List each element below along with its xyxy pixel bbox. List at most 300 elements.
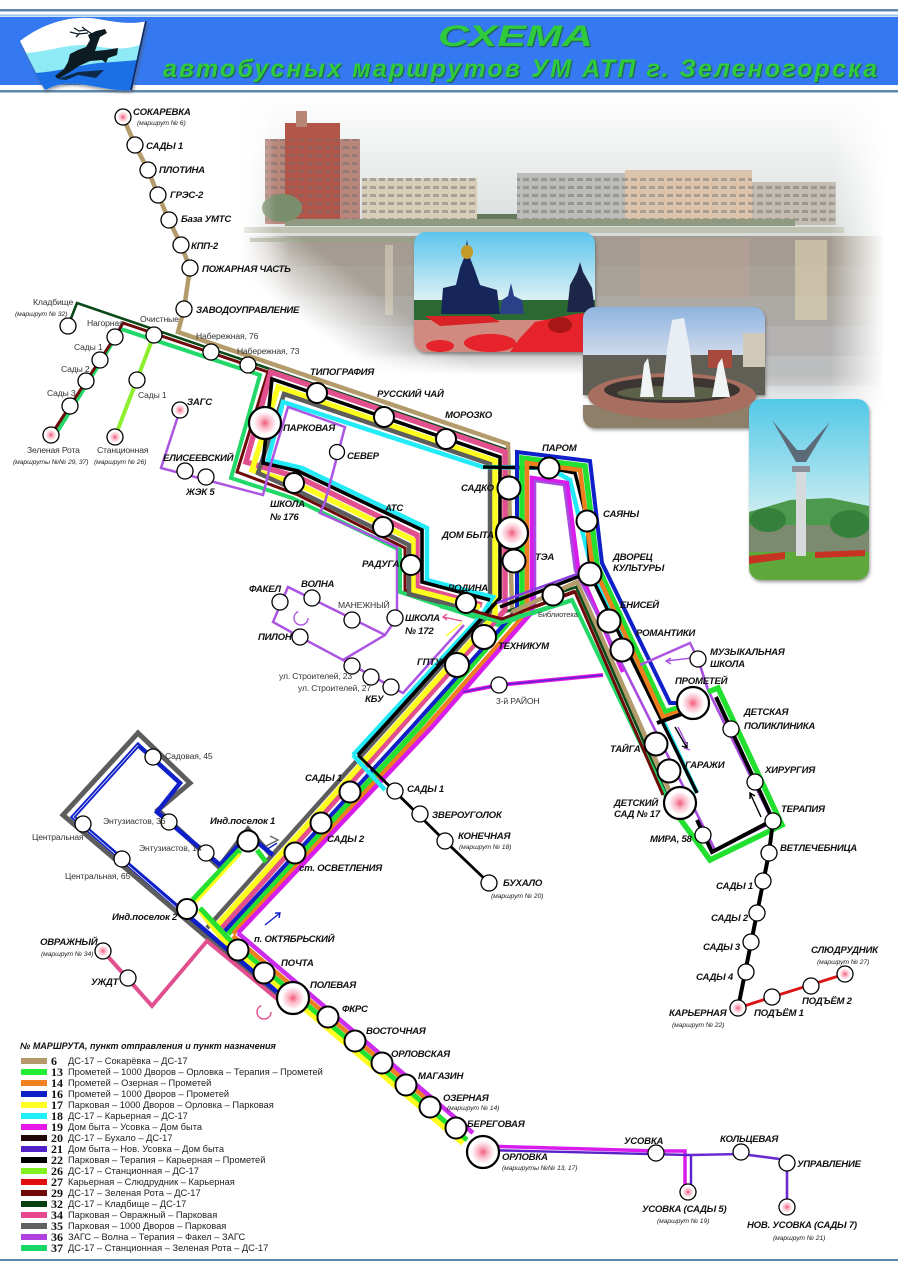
stop: Морозко xyxy=(436,410,493,449)
stop: Бухало: (маршрут № 20) xyxy=(491,893,543,900)
stop: Дворец культуры xyxy=(578,552,665,586)
stop: Зеленая Рота: (маршруты №№ 29, 37) xyxy=(13,459,88,466)
stop: Карьерная: КАРЬЕРНАЯ xyxy=(669,1008,728,1019)
legend: 32 xyxy=(51,1197,63,1211)
stop: Энтузиастов 36 xyxy=(103,814,177,830)
photo: stele xyxy=(749,399,870,580)
stop: Слюдрудник: (маршрут № 27) xyxy=(817,959,869,966)
route 36 violet inner xyxy=(535,481,773,850)
stop: База УМТС: База УМТС xyxy=(181,214,232,225)
stop: Заводоуправление: ЗАВОДОУПРАВЛЕНИЕ xyxy=(196,305,300,316)
stop: Сады 2 diagonal: САДЫ 2 xyxy=(327,834,365,845)
stop: Озерная: ОЗЕРНАЯ xyxy=(443,1093,490,1104)
route 21 to Usovka xyxy=(483,1150,691,1192)
stop: Сады 1 west xyxy=(74,342,108,368)
legend: Дом быта – Нов. Усовка – Дом быта xyxy=(68,1144,225,1154)
stop: Сады 3 west xyxy=(47,388,78,414)
stops and labels: south-east xyxy=(228,933,862,1242)
stop: Саяны: САЯНЫ xyxy=(603,509,640,520)
stop: Библиотека: Библиотека xyxy=(538,610,579,619)
stop: п. Октябрьский xyxy=(228,933,336,960)
legend: ДС-17 – Станционная – Зеленая Рота – ДС-17 xyxy=(68,1243,268,1253)
stop: Волна xyxy=(301,579,335,606)
stop: Детский сад № 17: ДЕТСКИЙ xyxy=(613,797,659,809)
stop: Техникум xyxy=(472,625,550,652)
stop: Север xyxy=(330,444,380,462)
route 18 cyan xyxy=(268,402,697,793)
stop: Пожарная часть: ПОЖАРНАЯ ЧАСТЬ xyxy=(202,264,291,275)
route 22 black upper xyxy=(263,379,500,755)
stop: Инд. поселок 1 xyxy=(210,816,275,852)
stop: ГРЭС-2 xyxy=(150,187,204,203)
stop: Усовка xyxy=(624,1136,664,1161)
legend: ДС-17 – Зеленая Рота – ДС-17 xyxy=(68,1188,201,1198)
stop: Сады 2 west xyxy=(61,364,94,389)
stop: Музыкальная школа: ШКОЛА xyxy=(710,659,745,670)
route 22 east loop xyxy=(697,697,773,852)
legend: ЗАГС – Волна – Терапия – Факел – ЗАГС xyxy=(68,1232,245,1242)
stop: Романтики: РОМАНТИКИ xyxy=(636,628,696,639)
stop: Морозко: МОРОЗКО xyxy=(445,410,493,421)
violet music school branch xyxy=(640,643,698,665)
stop: Подъём 1: ПОДЪЁМ 1 xyxy=(754,1008,804,1019)
stop: Школа 172 xyxy=(387,610,440,637)
stop: Садовая 45: Садовая, 45 xyxy=(165,751,213,761)
stop: Центральная xyxy=(32,816,91,842)
stop: Родина: РОДИНА xyxy=(448,583,488,594)
stop: Заводоуправление xyxy=(176,301,300,317)
stop: Набережная 76: Набережная, 76 xyxy=(196,331,259,341)
stop: Почта xyxy=(254,958,314,984)
route 34 xyxy=(103,941,293,1012)
stop: Восточная: ВОСТОЧНАЯ xyxy=(366,1026,427,1037)
stops and labels: Fakel loop xyxy=(249,579,550,706)
arrow marks xyxy=(257,611,761,1019)
stop: Озерная xyxy=(420,1093,499,1118)
title xyxy=(163,20,877,83)
stop: Полевая: ПОЛЕВАЯ xyxy=(310,980,357,991)
stop: Манежный: МАНЕЖНЫЙ xyxy=(338,599,390,610)
stop: УЖДТ: УЖДТ xyxy=(91,977,120,988)
route 16 blue xyxy=(223,452,693,933)
legend: 18 xyxy=(51,1109,63,1123)
stop: Родина xyxy=(448,583,488,613)
stop: 3-й район: 3-й РАЙОН xyxy=(496,695,539,706)
stop: Кладбище xyxy=(15,297,76,334)
stop: Слюдрудник: СЛЮДРУДНИК xyxy=(811,945,879,956)
stop: ЖЭК 5: ЖЭК 5 xyxy=(185,487,215,498)
stop: Очистные xyxy=(140,314,179,343)
stop: ст. Осветления xyxy=(284,842,383,874)
stop: Карьерная: (маршрут № 22) xyxy=(672,1022,724,1029)
stop: Сады 4 south: САДЫ 4 xyxy=(696,972,734,983)
junction violet xyxy=(497,574,577,603)
stop: ЖЭК 5 xyxy=(185,469,215,498)
stop: Магазин xyxy=(396,1071,464,1096)
stop: Школа 172: ШКОЛА xyxy=(405,613,440,624)
stop: Садко xyxy=(461,476,520,500)
legend: 29 xyxy=(51,1186,63,1200)
route 29 dark red xyxy=(51,323,663,795)
stop: Восточная xyxy=(344,1026,427,1052)
stop: Музыкальная школа xyxy=(690,647,786,670)
stop: ТЭА: ТЭА xyxy=(535,552,554,563)
stop: Сады 1 diagonal: САДЫ 1 xyxy=(305,773,342,784)
stop: Пилон: ПИЛОН xyxy=(258,632,293,643)
stop: Конечная: (маршрут № 18) xyxy=(459,844,511,851)
stop: Школа 176: ШКОЛА xyxy=(270,499,305,510)
stop: Хирургия: ХИРУРГИЯ xyxy=(764,765,816,776)
stop: Кладбище: Кладбище xyxy=(33,297,73,307)
legend: 16 xyxy=(51,1087,63,1101)
stop: Тайга: ТАЙГА xyxy=(610,743,641,755)
stop: Русский чай xyxy=(374,388,445,427)
stop: КПП-2: КПП-2 xyxy=(191,241,219,252)
stop: Кладбище: (маршрут № 32) xyxy=(15,311,67,318)
stop: Нов. Усовка (Сады 7): (маршрут № 21) xyxy=(773,1235,825,1242)
legend: Прометей – 1000 Дворов – Орловка – Терапия – Прометей xyxy=(68,1067,323,1077)
icon: city flag with deer xyxy=(20,18,147,90)
stop: ФКРС: ФКРС xyxy=(342,1004,369,1015)
stop: Дом быта: ДОМ БЫТА xyxy=(441,530,494,541)
stop: Паром: ПАРОМ xyxy=(542,443,578,454)
route lines xyxy=(51,117,845,1207)
stop: Мира, 58 xyxy=(650,827,711,845)
stop: Орловка xyxy=(467,1136,577,1172)
stop: Нагорная: Нагорная xyxy=(87,318,124,328)
stop: Ветлечебница xyxy=(761,843,857,861)
stop: Магазин: МАГАЗИН xyxy=(418,1071,464,1082)
SE bundle orange xyxy=(233,936,430,1102)
SE bundle yellow xyxy=(200,910,463,1143)
legend: 17 xyxy=(51,1098,63,1112)
stop: Школа 176 xyxy=(270,473,305,523)
route 22 east xyxy=(483,467,697,793)
stop: Подъём 1 xyxy=(754,989,804,1019)
legend: ДС-17 – Станционная – ДС-17 xyxy=(68,1166,199,1176)
stop: Станционная: Станционная xyxy=(97,445,149,455)
stop: Типография: ТИПОГРАФИЯ xyxy=(310,367,375,378)
stop: Управление: УПРАВЛЕНИЕ xyxy=(797,1159,862,1170)
stop: Зеленая Рота xyxy=(13,427,88,466)
route 17 yellow xyxy=(213,387,495,930)
legend: ДС-17 – Кладбище – ДС-17 xyxy=(68,1199,186,1209)
legend: 19 xyxy=(51,1120,63,1134)
legend: 37 xyxy=(51,1241,63,1255)
stop: Дворец культуры: ДВОРЕЦ xyxy=(612,552,653,563)
stop: Сады 2 south: САДЫ 2 xyxy=(711,913,749,924)
legend: Прометей – Озерная – Прометей xyxy=(68,1078,211,1088)
stop: Инд. поселок 2: Инд.поселок 2 xyxy=(112,912,178,923)
stop: Сады 1 west: Сады 1 xyxy=(74,342,103,352)
stop: ул. Строителей 23: ул. Строителей, 23 xyxy=(279,671,352,681)
short village link xyxy=(257,850,266,862)
stop: Сады 1 Station: Сады 1 xyxy=(138,390,167,400)
violet branch to diagonal xyxy=(343,625,464,693)
stop: КБУ: КБУ xyxy=(365,694,385,705)
title: автобусных маршрутов УМ АТП г. Зеленогорска xyxy=(163,55,877,83)
stops and labels: central loop xyxy=(249,367,696,662)
legend: 27 xyxy=(51,1175,63,1189)
stop: Нов. Усовка (Сады 7): НОВ. УСОВКА (САДЫ 7) xyxy=(747,1220,857,1231)
stop: Усовка (Сады 5): УСОВКА (САДЫ 5) xyxy=(642,1204,726,1215)
route 21 east xyxy=(691,1154,787,1207)
route 6 tan xyxy=(123,117,669,790)
stop: 3-й район xyxy=(491,677,539,706)
route 35 grey xyxy=(207,394,490,928)
stop: Волна: ВОЛНА xyxy=(301,579,335,590)
stop: Сады 1 Station xyxy=(129,372,167,400)
stop: Сады 2 diagonal xyxy=(310,812,365,845)
stop: Береговая: БЕРЕГОВАЯ xyxy=(467,1119,526,1130)
stop: Елисеевский xyxy=(163,452,235,479)
stop: Набережная 76 xyxy=(196,331,259,360)
stops and labels: north-west branches xyxy=(13,297,300,498)
legend: 21 xyxy=(51,1142,63,1156)
stop: Сады 2 west: Сады 2 xyxy=(61,364,90,374)
stop: Полевая xyxy=(277,980,357,1014)
stop: Усовка (Сады 5): (маршрут № 19) xyxy=(657,1218,709,1225)
legend: 20 xyxy=(51,1131,63,1145)
ZAGS branch violet xyxy=(161,407,397,660)
stop: Прометей xyxy=(675,675,729,719)
stop: Инд. поселок 2 xyxy=(112,899,197,923)
stop: ГПТУ: ГПТУ xyxy=(417,657,443,668)
stop: Мира, 58: МИРА, 58 xyxy=(650,834,693,845)
stop: Орловка: ОРЛОВКА xyxy=(502,1152,548,1163)
stop: Сады 1: САДЫ 1 xyxy=(146,141,183,152)
stop: База УМТС xyxy=(161,212,232,228)
route 14 orange xyxy=(233,463,690,934)
stop: Карьерная xyxy=(669,1000,746,1029)
stop: ГПТУ xyxy=(417,653,469,677)
stop: Дом быта xyxy=(441,517,528,549)
stop: Сады 1 south xyxy=(716,873,771,892)
stop: ТЭА xyxy=(502,550,554,572)
stop: Саяны xyxy=(576,509,640,532)
stop: Сады 1 xyxy=(127,137,183,153)
stop: Елисеевский: ЕЛИСЕЕВСКИЙ xyxy=(163,452,235,464)
stop: Садко: САДКО xyxy=(461,483,495,494)
legend: 14 xyxy=(51,1076,63,1090)
stops and labels: east loop xyxy=(610,647,879,1029)
stop: Школа 176: № 176 xyxy=(270,512,299,523)
stop: КПП-2 xyxy=(173,237,219,253)
stop: Детская поликлиника: ДЕТСКАЯ xyxy=(743,707,789,718)
legend: Дом быта – Усовка – Дом быта xyxy=(68,1122,203,1132)
stop: Гаражи xyxy=(658,760,726,782)
stop: Сады 3 west: Сады 3 xyxy=(47,388,76,398)
stops and labels: south-west xyxy=(32,749,543,988)
route 34 pink xyxy=(219,372,505,931)
stop: ЗАГС xyxy=(172,397,213,418)
stop: Кольцевая xyxy=(720,1134,779,1160)
stop: Звероуголок xyxy=(412,806,503,822)
photo: fountain xyxy=(583,307,765,428)
stop: Овражный: ОВРАЖНЫЙ xyxy=(40,936,99,948)
legend: 36 xyxy=(51,1230,63,1244)
stop: Хирургия xyxy=(747,765,816,790)
stop: Овражный: (маршрут № 34) xyxy=(41,951,93,958)
stop: Овражный xyxy=(40,936,111,959)
stop: Центральная 65: Центральная, 65 xyxy=(65,871,131,881)
stop: КБУ xyxy=(365,679,399,705)
stop: Романтики xyxy=(610,628,696,662)
stop: Энтузиастов 14: Энтузиастов, 14 xyxy=(139,843,202,853)
route 20 to Bukhalo xyxy=(358,755,489,883)
route 22 Prometei link xyxy=(657,711,690,723)
legend: 34 xyxy=(51,1208,63,1222)
route 19 to Usovka xyxy=(483,1146,685,1192)
stop: Конечная: КОНЕЧНАЯ xyxy=(458,831,511,842)
route 13 village link xyxy=(193,850,240,900)
stop: ГРЭС-2: ГРЭС-2 xyxy=(170,190,204,201)
stop: Техникум: ТЕХНИКУМ xyxy=(498,641,550,652)
legend: 6 xyxy=(51,1054,57,1068)
stop: ЗАГС: ЗАГС xyxy=(187,397,213,408)
stop: Сады 2 south xyxy=(711,905,765,924)
stop: ст. Осветления: ст. ОСВЕТЛЕНИЯ xyxy=(299,863,383,874)
stop: Станционная xyxy=(94,429,149,466)
stops and labels: north stalk xyxy=(115,107,300,317)
SE bundle green xyxy=(200,908,467,1140)
route 16 blue lower loop xyxy=(73,745,277,992)
stop: Сады 1 Bukhalo line: САДЫ 1 xyxy=(407,784,444,795)
white core xyxy=(73,745,187,917)
stop: Детская поликлиника: ПОЛИКЛИНИКА xyxy=(744,721,815,732)
route 22 south branch xyxy=(738,821,773,1008)
SE bundle magenta xyxy=(238,933,473,1133)
stop: Сокаревка xyxy=(115,107,191,127)
stop: Терапия xyxy=(765,804,826,829)
route 26 lime xyxy=(115,335,154,437)
stop: Терапия: ТЕРАПИЯ xyxy=(781,804,826,815)
stop: п. Октябрьский: п. ОКТЯБРЬСКИЙ xyxy=(254,933,336,945)
route 27 red xyxy=(738,974,845,1008)
stop: Зеленая Рота: Зеленая Рота xyxy=(27,445,80,455)
legend: ДС-17 – Бухало – ДС-17 xyxy=(68,1133,173,1143)
photo: city panorama with river xyxy=(240,95,898,440)
route 35 grey lower loop xyxy=(63,733,277,997)
legend: Парковая – 1000 Дворов – Парковая xyxy=(68,1221,226,1231)
stop: Сады 1 diagonal xyxy=(305,773,360,802)
stop: Пожарная часть xyxy=(182,260,291,276)
stop: Ветлечебница: ВЕТЛЕЧЕБНИЦА xyxy=(780,843,857,854)
legend: ДС-17 – Карьерная – ДС-17 xyxy=(68,1111,188,1121)
stop: Радуга: РАДУГА xyxy=(362,559,400,570)
stop: Управление xyxy=(779,1155,862,1171)
stop: Манежный xyxy=(338,599,390,628)
stop: Усовка: УСОВКА xyxy=(624,1136,663,1147)
stop: Факел: ФАКЕЛ xyxy=(249,584,281,595)
stop: Детская поликлиника xyxy=(723,707,815,737)
stop: Нов. Усовка (Сады 7) xyxy=(747,1199,857,1242)
stop: Библиотека xyxy=(538,584,579,619)
stop: Центральная: Центральная xyxy=(32,832,84,842)
header band xyxy=(0,9,898,92)
stop: АТС: АТС xyxy=(384,503,404,514)
stop: Звероуголок: ЗВЕРОУГОЛОК xyxy=(432,810,503,821)
legend: 22 xyxy=(51,1153,63,1167)
route 17 village link xyxy=(196,854,240,902)
route 13 green xyxy=(228,458,693,934)
stop: Плотина: ПЛОТИНА xyxy=(159,165,205,176)
stop: Энтузиастов 36: Энтузиастов, 36 xyxy=(103,816,166,826)
stop: Енисей: ЕНИСЕЙ xyxy=(620,599,660,611)
stop: Кольцевая: КОЛЬЦЕВАЯ xyxy=(720,1134,779,1145)
stop: Сокаревка: СОКАРЕВКА xyxy=(133,107,191,118)
stop: Парковая: ПАРКОВАЯ xyxy=(283,423,336,434)
stop: Север: СЕВЕР xyxy=(347,451,380,462)
stop: Прометей: ПРОМЕТЕЙ xyxy=(675,675,729,687)
stop: Сады 4 south xyxy=(696,964,754,983)
legend: 13 xyxy=(51,1065,63,1079)
stop: Детский сад № 17 xyxy=(613,787,696,820)
stop: ул. Строителей 27 xyxy=(298,669,379,693)
route 37 green xyxy=(54,329,670,805)
magenta 3rd district xyxy=(463,675,603,692)
legend xyxy=(20,1041,323,1255)
stop: Бухало: БУХАЛО xyxy=(503,878,543,889)
stop: Инд. поселок 1: Инд.поселок 1 xyxy=(210,816,275,827)
stop: Станционная: (маршрут № 26) xyxy=(94,459,146,466)
stop: Бухало xyxy=(481,875,543,900)
stop: Сокаревка: (маршрут № 6) xyxy=(137,120,186,127)
stop: Береговая xyxy=(446,1118,526,1138)
stop: Усовка (Сады 5) xyxy=(642,1184,726,1225)
stop: Сады 1 Bukhalo line xyxy=(387,783,444,799)
stop: Школа 172: № 172 xyxy=(405,626,434,637)
junction black xyxy=(500,572,590,607)
legend: 26 xyxy=(51,1164,63,1178)
junction brown 29 xyxy=(470,591,575,619)
stop: Парковая xyxy=(249,407,336,439)
legend: Прометей – 1000 Дворов – Прометей xyxy=(68,1089,229,1099)
stop: Факел xyxy=(249,584,288,610)
stop: АТС xyxy=(373,503,404,537)
route 18 branch xyxy=(353,755,385,790)
legend: Парковая – 1000 Дворов – Орловка – Парковая xyxy=(68,1100,274,1110)
stop: Центральная 65 xyxy=(65,851,131,881)
stop: ул. Строителей 23 xyxy=(279,658,360,681)
stop: Садовая 45 xyxy=(145,749,213,765)
legend: Парковая – Овражный – Парковая xyxy=(68,1210,217,1220)
stop: Типография xyxy=(307,367,375,403)
stop: УЖДТ xyxy=(91,970,136,988)
stop: Подъём 2: ПОДЪЁМ 2 xyxy=(802,996,853,1007)
route 19 magenta xyxy=(238,478,623,933)
stop: Набережная 73 xyxy=(237,346,300,373)
stop: Подъём 2 xyxy=(802,978,853,1007)
junction green 37 xyxy=(440,600,573,622)
stop: Радуга xyxy=(362,555,421,575)
stop: Сады 1 south: САДЫ 1 xyxy=(716,881,753,892)
stop: Нагорная xyxy=(87,318,124,345)
stop: Енисей xyxy=(598,599,660,632)
route 32 dark green xyxy=(68,303,666,793)
photo: church xyxy=(414,232,595,352)
stop: Плотина xyxy=(140,162,205,178)
stop: ФКРС xyxy=(318,1004,369,1028)
stop: Почта: ПОЧТА xyxy=(281,958,314,969)
stop: ул. Строителей 27: ул. Строителей, 27 xyxy=(298,683,371,693)
stop: Дворец культуры: КУЛЬТУРЫ xyxy=(613,563,665,574)
stop: Музыкальная школа: МУЗЫКАЛЬНАЯ xyxy=(710,647,786,658)
stop: Набережная 73: Набережная, 73 xyxy=(237,346,300,356)
stop: Тайга xyxy=(610,732,668,756)
stop: Паром xyxy=(538,443,578,478)
stop: Озерная: (маршрут № 14) xyxy=(447,1105,499,1112)
